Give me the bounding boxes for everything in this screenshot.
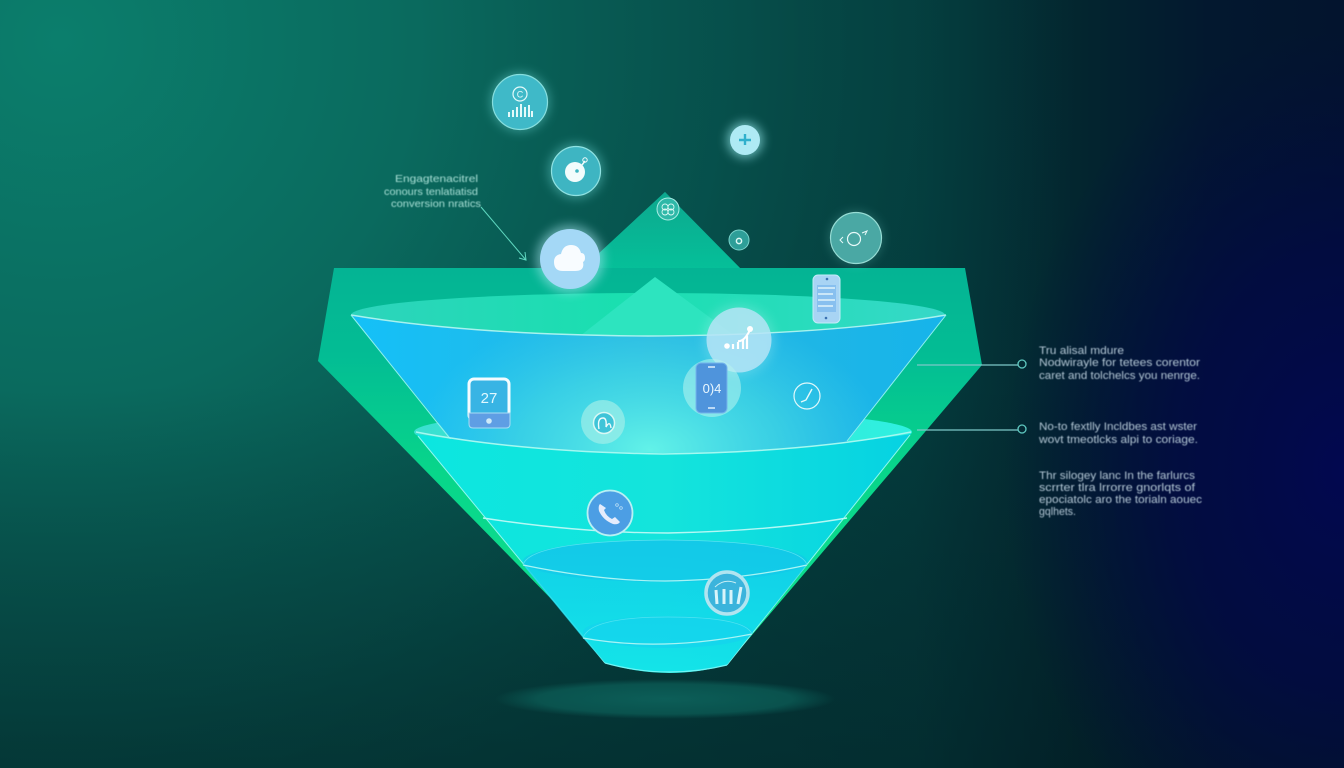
- text block 3: scrrter tlra lrrorre gnorlqts of: [1039, 482, 1196, 494]
- icon: phone list: [813, 275, 840, 323]
- back green shape: [318, 192, 982, 662]
- top tier of funnel: [351, 277, 946, 456]
- text block 2: wovt tmeotlcks alpi to coriage.: [1038, 434, 1198, 446]
- icon: pen ring: [794, 383, 820, 409]
- icon: swirl bubble: [581, 400, 625, 444]
- icon: phone with digits: [683, 359, 741, 417]
- text block 1: Tru alisal mdure: [1039, 345, 1124, 357]
- text block 3: [1039, 470, 1203, 518]
- icon: telephone: [588, 490, 632, 536]
- icon: calendar tablet: 27: [481, 390, 497, 407]
- text block 3: Thr silogey lanc In the farlurcs: [1039, 470, 1196, 482]
- icon: disc: [548, 143, 604, 199]
- connector 1: [917, 360, 1026, 368]
- icon: phone with digits: 0)4: [703, 381, 721, 396]
- text block 3: epociatolc aro the torialn aouec: [1039, 494, 1203, 506]
- icon: bar chart ring: [706, 572, 748, 614]
- middle tier of funnel: [416, 432, 911, 673]
- icon: calendar tablet: [469, 379, 510, 428]
- icon: orbit: [829, 211, 883, 265]
- left callout text: conours tenlatiatisd: [384, 186, 478, 198]
- icon: small brain badge: [657, 198, 679, 220]
- text block 2: No-to fextlly Incldbes ast wster: [1039, 421, 1197, 433]
- text block 2: [1038, 421, 1198, 446]
- left callout text: [384, 173, 481, 210]
- floor shadow: [495, 679, 835, 719]
- icon: coin and bars: C: [517, 90, 524, 100]
- lower tier of funnel: [523, 540, 807, 672]
- icon: cloud: [536, 225, 604, 293]
- icon: plus: [727, 122, 763, 158]
- left callout: [384, 173, 526, 260]
- left callout text: Engagtenacitrel: [395, 173, 478, 185]
- icon: chart bubble: [703, 304, 775, 376]
- text block 1: [1039, 345, 1200, 382]
- icon: coin and bars: [490, 72, 550, 132]
- connector 2: [917, 425, 1026, 433]
- icon: small ring: [729, 230, 749, 250]
- funnel: [318, 192, 982, 673]
- text block 3: gqlhets.: [1039, 506, 1076, 518]
- arrow: [481, 207, 526, 260]
- left callout text: conversion nratics: [391, 198, 481, 210]
- text block 1: Nodwirayle for tetees corentor: [1039, 357, 1200, 369]
- right callouts: [917, 345, 1203, 518]
- text block 1: caret and tolchelcs you nenrge.: [1039, 370, 1200, 382]
